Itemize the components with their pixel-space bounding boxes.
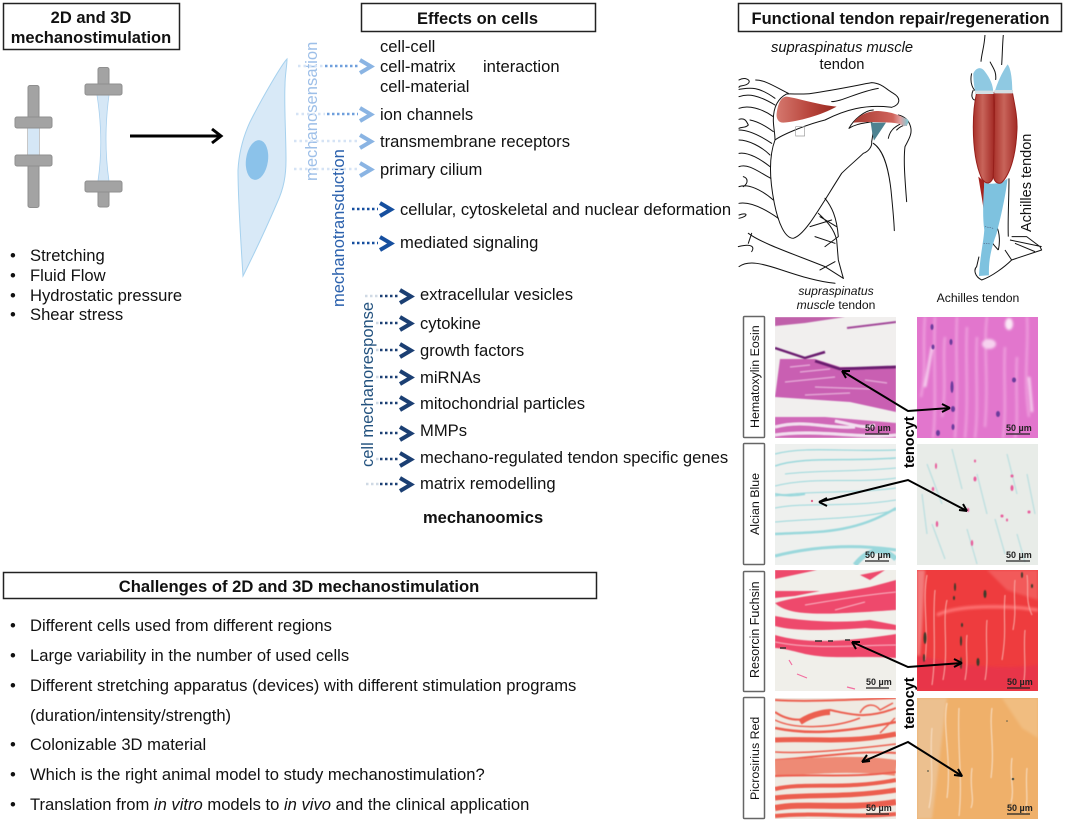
label: column supraspinatus (797, 284, 875, 312)
text: mechanoresponse effects: cytokine (420, 314, 481, 333)
list: challenges: Which is the right animal model to study mechanostimulation? (30, 765, 485, 784)
text: mechanoresponse effects: growth factors (420, 341, 524, 360)
label: column supraspinatus: supraspinatus (798, 284, 874, 298)
scale bars: 50 µm: 50 µm (865, 550, 891, 560)
scale bars: 50 µm: 50 µm (865, 423, 891, 433)
heading: Functional tendon repair: Functional tendon repair/regeneration (752, 10, 1049, 28)
text: mechanosensation effects: cell-matrix (380, 57, 456, 76)
text: mechanoresponse effects: miRNAs (420, 368, 481, 387)
list: types of stimulation: • (10, 305, 16, 324)
label: cell mechanoresponse: cell mechanoresponse (359, 302, 377, 467)
label: Achilles tendon vertical: Achilles tendon (1019, 134, 1035, 232)
text: mechanosensation effects: transmembrane receptors (380, 132, 570, 151)
list: types of stimulation: • (10, 286, 16, 305)
label: mechanosensation: mechanosensation (302, 42, 321, 181)
list: challenges: • (10, 795, 16, 814)
list: types of stimulation (10, 246, 182, 324)
stain label: Hematoxylin Eosin: Hematoxylin Eosin (748, 325, 762, 428)
list: challenges: Translation from in vitro models to in vivo and the clinical application (30, 795, 529, 814)
text: mechanotransduction effects: mediated signaling (400, 233, 538, 252)
micrograph: Alcian Blue supraspinatus (775, 444, 896, 565)
heading: Challenges: Challenges of 2D and 3D mechanostimulation (119, 577, 479, 596)
scale bars: 50 µm: 50 µm (1007, 803, 1033, 813)
list: challenges: Colonizable 3D material (30, 735, 206, 754)
stain label: Hematoxylin Eosin (744, 316, 764, 438)
heading: 2D and 3D mechanostimulation: 2D and 3D (51, 9, 131, 27)
icon: 3D stretching device (85, 68, 122, 207)
list: challenges: • (10, 765, 16, 784)
heading: Challenges (4, 572, 596, 598)
text: mechanosensation effects: ion channels (380, 105, 473, 124)
label: tenocyt upper: tenocyt (902, 416, 918, 468)
list: types of stimulation: • (10, 246, 16, 265)
list: challenges: • (10, 676, 16, 695)
heading: 2D and 3D mechanostimulation: mechanostimulation (11, 29, 171, 47)
illustration: leg with Achilles tendon (971, 35, 1042, 280)
label: supraspinatus muscle tendon (771, 40, 913, 73)
scale bars: 50 µm: 50 µm (1007, 677, 1033, 687)
arrows: cell mechanoresponse (365, 290, 411, 491)
list: challenges: Different stretching apparatus (devices) with different stimulation programs (30, 676, 576, 695)
text: mechanoresponse effects: MMPs (420, 421, 467, 440)
list: challenges: Large variability in the number of used cells (30, 646, 349, 665)
list: types of stimulation: Fluid Flow (30, 266, 107, 285)
stain label: Picrosirius Red: Picrosirius Red (748, 717, 762, 800)
list: challenges: (duration/intensity/strength) (30, 706, 231, 725)
illustration: shoulder anatomy (738, 79, 911, 283)
list: types of stimulation: • (10, 266, 16, 285)
text: mechanosensation effects: cell-material (380, 77, 469, 96)
text: mechanosensation effects (380, 37, 570, 179)
arrows: mechanosensation (294, 60, 371, 176)
micrograph: Picrosirius Red supraspinatus (775, 698, 896, 819)
label: column Achilles: Achilles tendon (937, 291, 1019, 305)
heading: 2D and 3D mechanostimulation (4, 4, 180, 50)
label: column supraspinatus: muscle tendon (797, 298, 875, 312)
micrograph: Alcian Blue Achilles (917, 444, 1038, 565)
scale bars: 50 µm: 50 µm (866, 803, 892, 813)
text: mechanosensation effects: cell-cell (380, 37, 435, 56)
arrow: device to cell (130, 129, 221, 143)
stain label: Alcian Blue: Alcian Blue (748, 473, 762, 535)
heading: Effects on cells: Effects on cells (417, 10, 538, 28)
list: challenges: • (10, 735, 16, 754)
text: mechanosensation effects: interaction (483, 57, 560, 76)
list: types of stimulation: Stretching (30, 246, 105, 265)
list: challenges: Different cells used from different regions (30, 616, 332, 635)
label: supraspinatus muscle tendon: supraspinatus muscle (771, 40, 913, 56)
micrograph: Resorcin Fuchsin supraspinatus (775, 570, 896, 691)
icon: 2D stretching device (15, 86, 52, 208)
text: mechanoresponse effects: matrix remodelling (420, 474, 556, 493)
arrows: tenocyte pointers, lower pair (852, 642, 962, 776)
label: tenocyt lower: tenocyt (902, 677, 918, 729)
scale bars: 50 µm: 50 µm (1006, 550, 1032, 560)
micrograph: Hematoxylin Eosin Achilles (917, 317, 1038, 438)
label: supraspinatus muscle tendon: tendon (820, 57, 864, 73)
text: mechanosensation effects: primary cilium (380, 160, 482, 179)
label: mechanoomics: mechanoomics (423, 509, 543, 527)
list: challenges: • (10, 646, 16, 665)
text: mechanoresponse effects: extracellular vesicles (420, 285, 573, 304)
list: challenges: • (10, 616, 16, 635)
micrograph: Resorcin Fuchsin Achilles (917, 570, 1038, 691)
heading: Functional tendon repair (738, 4, 1062, 32)
stain label: Picrosirius Red (744, 698, 764, 818)
text: mechanoresponse effects (420, 285, 728, 493)
micrograph: Hematoxylin Eosin supraspinatus (775, 317, 896, 438)
arrows: tenocyte pointers, upper pair (819, 371, 967, 511)
stain label: Resorcin Fuchsin (744, 572, 764, 692)
text: mechanotransduction effects (400, 200, 731, 252)
list: types of stimulation: Shear stress (30, 305, 123, 324)
text: mechanotransduction effects: cellular, cytoskeletal and nuclear deformation (400, 200, 731, 219)
list: challenges (10, 616, 576, 814)
scale bars: 50 µm (865, 423, 1033, 814)
heading: Effects on cells (362, 4, 596, 32)
scale bars: 50 µm: 50 µm (1006, 423, 1032, 433)
label: mechanotransduction: mechanotransduction (330, 149, 348, 307)
stain label: Alcian Blue (744, 444, 764, 564)
icon: elongated cell with nucleus (238, 59, 287, 276)
arrows: mechanotransduction (352, 203, 391, 250)
text: mechanoresponse effects: mitochondrial particles (420, 394, 585, 413)
micrograph: Picrosirius Red Achilles (917, 698, 1038, 819)
text: mechanoresponse effects: mechano-regulated tendon specific genes (420, 448, 728, 467)
stain label: Resorcin Fuchsin: Resorcin Fuchsin (748, 581, 762, 678)
list: types of stimulation: Hydrostatic pressure (30, 286, 182, 305)
scale bars: 50 µm: 50 µm (866, 677, 892, 687)
